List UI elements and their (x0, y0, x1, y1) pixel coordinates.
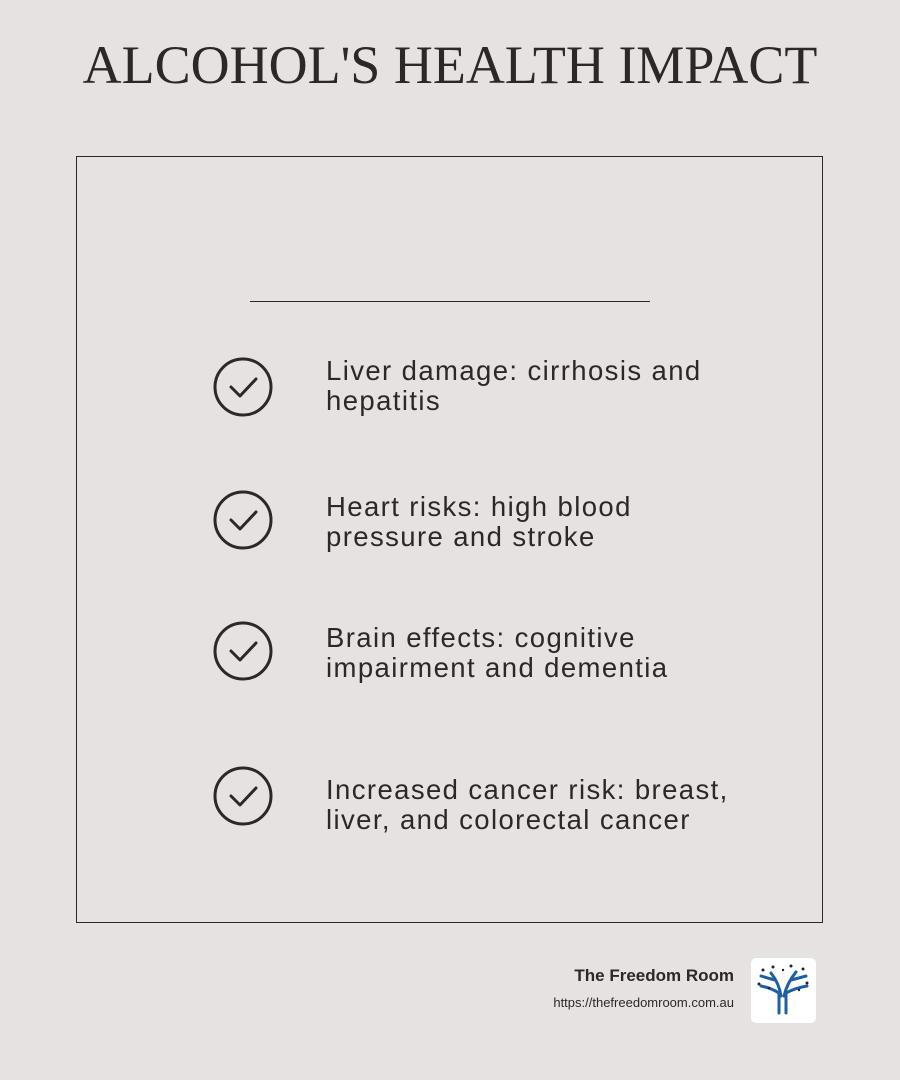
logo (751, 958, 816, 1023)
panel: frame (76, 156, 823, 923)
footer brand: https://thefreedomroom.com.au (553, 995, 734, 1010)
item: brain (214, 622, 669, 683)
item: cancer (214, 766, 729, 835)
item: liver: Liver damage: cirrhosis and (326, 355, 702, 386)
item: cancer: liver, and colorectal cancer (326, 804, 691, 835)
item: cancer: Increased cancer risk: breast, (326, 774, 729, 805)
title: ALCOHOL'S HEALTH IMPACT (83, 35, 817, 95)
icon: check (214, 766, 272, 826)
item: liver (214, 355, 702, 416)
divider line (250, 301, 650, 302)
icon: check (214, 622, 272, 680)
icon: check (214, 490, 272, 550)
item: brain: Brain effects: cognitive (326, 622, 636, 653)
item: heart: Heart risks: high blood (326, 491, 632, 522)
item: brain: impairment and dementia (326, 652, 669, 683)
item: heart (214, 490, 632, 552)
footer brand: The Freedom Room (574, 966, 734, 985)
item: liver: hepatitis (326, 385, 441, 416)
footer brand (553, 966, 734, 1010)
item: heart: pressure and stroke (326, 521, 596, 552)
icon: check (214, 358, 272, 416)
